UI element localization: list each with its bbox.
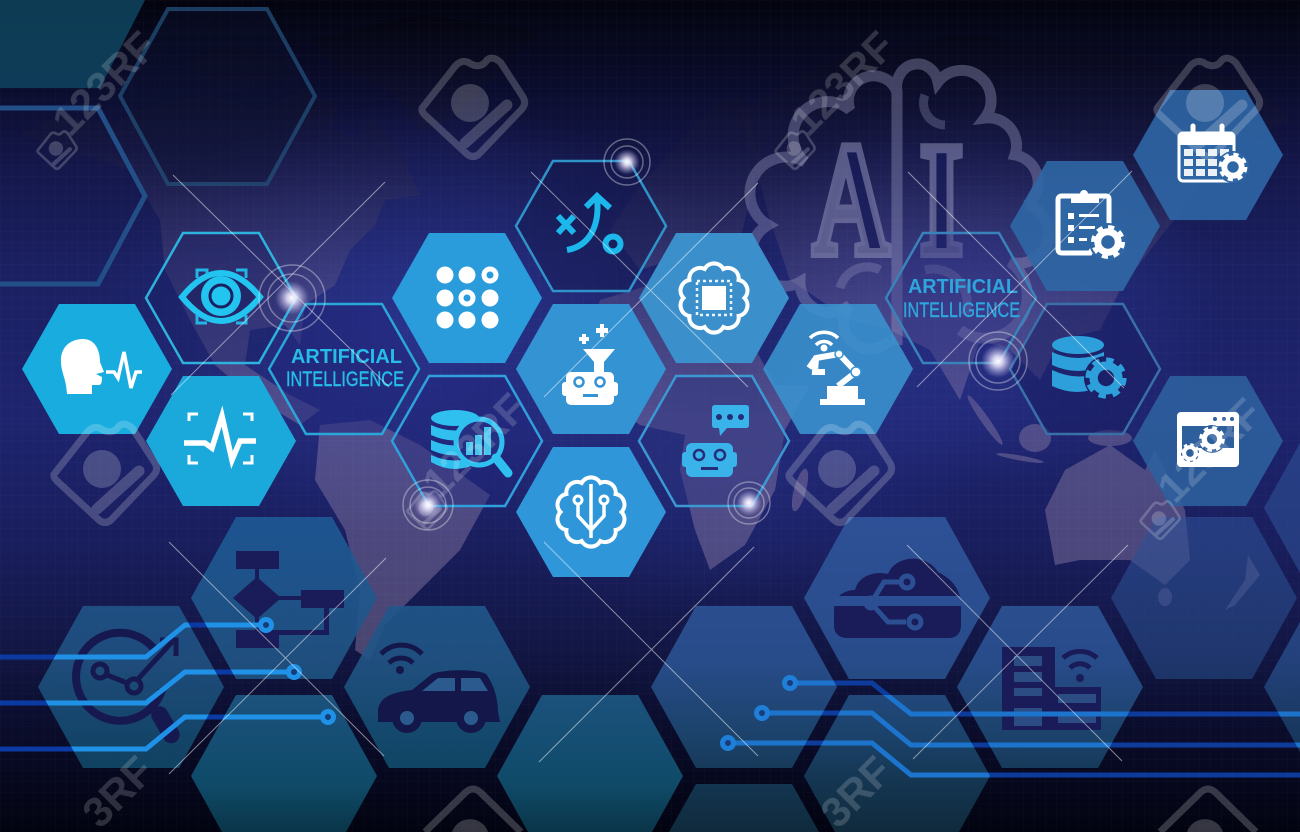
icon: dot matrix: [436, 266, 498, 328]
crossing light lines: [169, 171, 1132, 774]
AI brain outline: [750, 64, 1048, 349]
icon: connected car: [378, 645, 500, 733]
circuit lines right: [722, 678, 1300, 775]
icon: cloud network: [834, 559, 961, 638]
icon: clipboard gear: [1058, 190, 1127, 261]
icon: robot arm with wifi: [809, 332, 865, 405]
title text right: INTELLIGENCE: [903, 299, 1020, 322]
panel: chip brain: [639, 233, 789, 363]
title text: ARTIFICIAL: [291, 346, 402, 368]
watermark text: 123RF: [781, 22, 904, 144]
icon: database gear: [1052, 336, 1128, 400]
top-left decorative hexagons: [0, 0, 315, 284]
panel: artificial intelligence label right: [886, 233, 1036, 363]
icon: pulse scan: [184, 414, 256, 463]
icon: speaking head: [61, 339, 142, 394]
icon: calendar gear: [1179, 126, 1249, 183]
panel: pattern grid: [392, 233, 542, 363]
panel: computer vision: [146, 233, 296, 363]
lens flare 3: [403, 480, 453, 530]
panel: strategy: [516, 161, 666, 291]
panel: clipboard settings: [1010, 161, 1160, 291]
title text: [286, 346, 404, 391]
icon: database magnifier: [431, 410, 508, 473]
panel: database settings: [1010, 304, 1160, 434]
icon: circuit brain: [558, 477, 624, 547]
panel: machine learning robot: [516, 304, 666, 434]
title text right: [903, 276, 1020, 322]
background glow: [100, 100, 1220, 620]
icon: target analytics: [76, 633, 183, 746]
icon: smart building: [1002, 647, 1101, 730]
AI letters: I: [920, 110, 963, 288]
watermark text: 123RF: [1148, 389, 1271, 511]
icon: chat robot: [682, 405, 749, 477]
large background hexagons: [38, 443, 1300, 832]
icon: flowchart: [233, 551, 344, 648]
lens flare 4: [728, 482, 770, 524]
panel: speech recognition: [22, 304, 172, 434]
panel: robot arm: [763, 304, 913, 434]
panel: data search: [392, 376, 542, 506]
lens flare 5: [969, 332, 1027, 390]
lens flare 2: [604, 139, 650, 185]
panel: signal detection: [146, 376, 296, 506]
icon: browser gears: [1177, 412, 1239, 467]
icon: chip in brain: [681, 263, 747, 333]
watermark text: 123RF: [43, 22, 166, 144]
panel: web settings: [1133, 376, 1283, 506]
panel: chatbot: [639, 376, 789, 506]
panel: neural brain: [516, 447, 666, 577]
lens flare 1: [259, 265, 325, 331]
circuit lines left: [0, 620, 334, 749]
title text: INTELLIGENCE: [286, 368, 404, 391]
watermark text: 123RF: [413, 384, 536, 506]
world map: [20, 15, 1290, 660]
panel: calendar settings: [1133, 90, 1283, 220]
icon: robot with funnel: [562, 324, 618, 405]
panel: artificial intelligence label: [269, 304, 419, 434]
AI letters: A: [813, 110, 889, 288]
title text right: ARTIFICIAL: [908, 276, 1018, 298]
icon: strategy play: [558, 196, 620, 252]
icon: eye: [182, 270, 260, 323]
